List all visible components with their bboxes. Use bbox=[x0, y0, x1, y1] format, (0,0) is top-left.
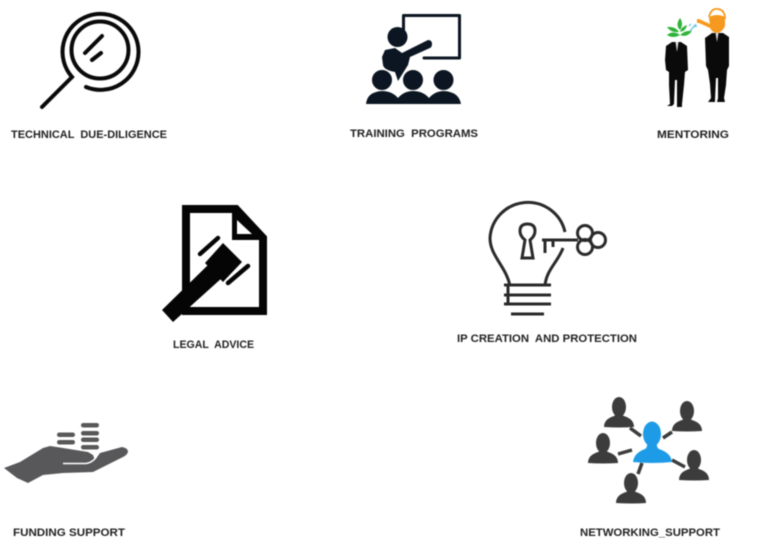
panel: technical due-diligence bbox=[11, 14, 167, 141]
water drops bbox=[689, 24, 697, 31]
panel: training programs bbox=[350, 16, 478, 140]
icon: trainer and students bbox=[366, 16, 461, 104]
watering can bbox=[697, 9, 725, 33]
label: funding support: FUNDING SUPPORT bbox=[13, 527, 125, 539]
connectors bbox=[618, 428, 685, 474]
person left bbox=[588, 433, 618, 464]
leaves bbox=[667, 18, 692, 37]
label: legal advice: LEGAL ADVICE bbox=[173, 339, 254, 351]
panel: mentoring bbox=[657, 9, 729, 141]
person right bbox=[679, 450, 709, 480]
label: ip creation and protection: IP CREATION AND PROTECTION bbox=[457, 333, 637, 345]
panel: funding support bbox=[4, 423, 128, 539]
icon: two businessmen with plant and watering can bbox=[665, 9, 729, 107]
person top right bbox=[672, 401, 702, 432]
panel: ip creation and protection bbox=[457, 202, 637, 345]
icon: hand with coins bbox=[4, 423, 128, 483]
icon: connected people network bbox=[588, 397, 709, 504]
label: technical due-diligence: TECHNICAL DUE-DILIGENCE bbox=[11, 129, 167, 141]
person center bbox=[633, 422, 672, 463]
right man bbox=[705, 33, 729, 102]
icon: lightbulb with key bbox=[490, 202, 606, 314]
left man bbox=[665, 42, 688, 107]
label: training programs: TRAINING PROGRAMS bbox=[350, 128, 478, 140]
icon: magnifying glass bbox=[42, 14, 139, 107]
panel: legal advice bbox=[162, 209, 267, 351]
person bottom bbox=[616, 473, 646, 504]
icon: document with gavel bbox=[162, 209, 267, 322]
person top left bbox=[604, 397, 634, 428]
panel: networking support bbox=[580, 397, 720, 539]
label: networking support: NETWORKING_SUPPORT bbox=[580, 527, 720, 539]
label: mentoring: MENTORING bbox=[657, 129, 729, 141]
